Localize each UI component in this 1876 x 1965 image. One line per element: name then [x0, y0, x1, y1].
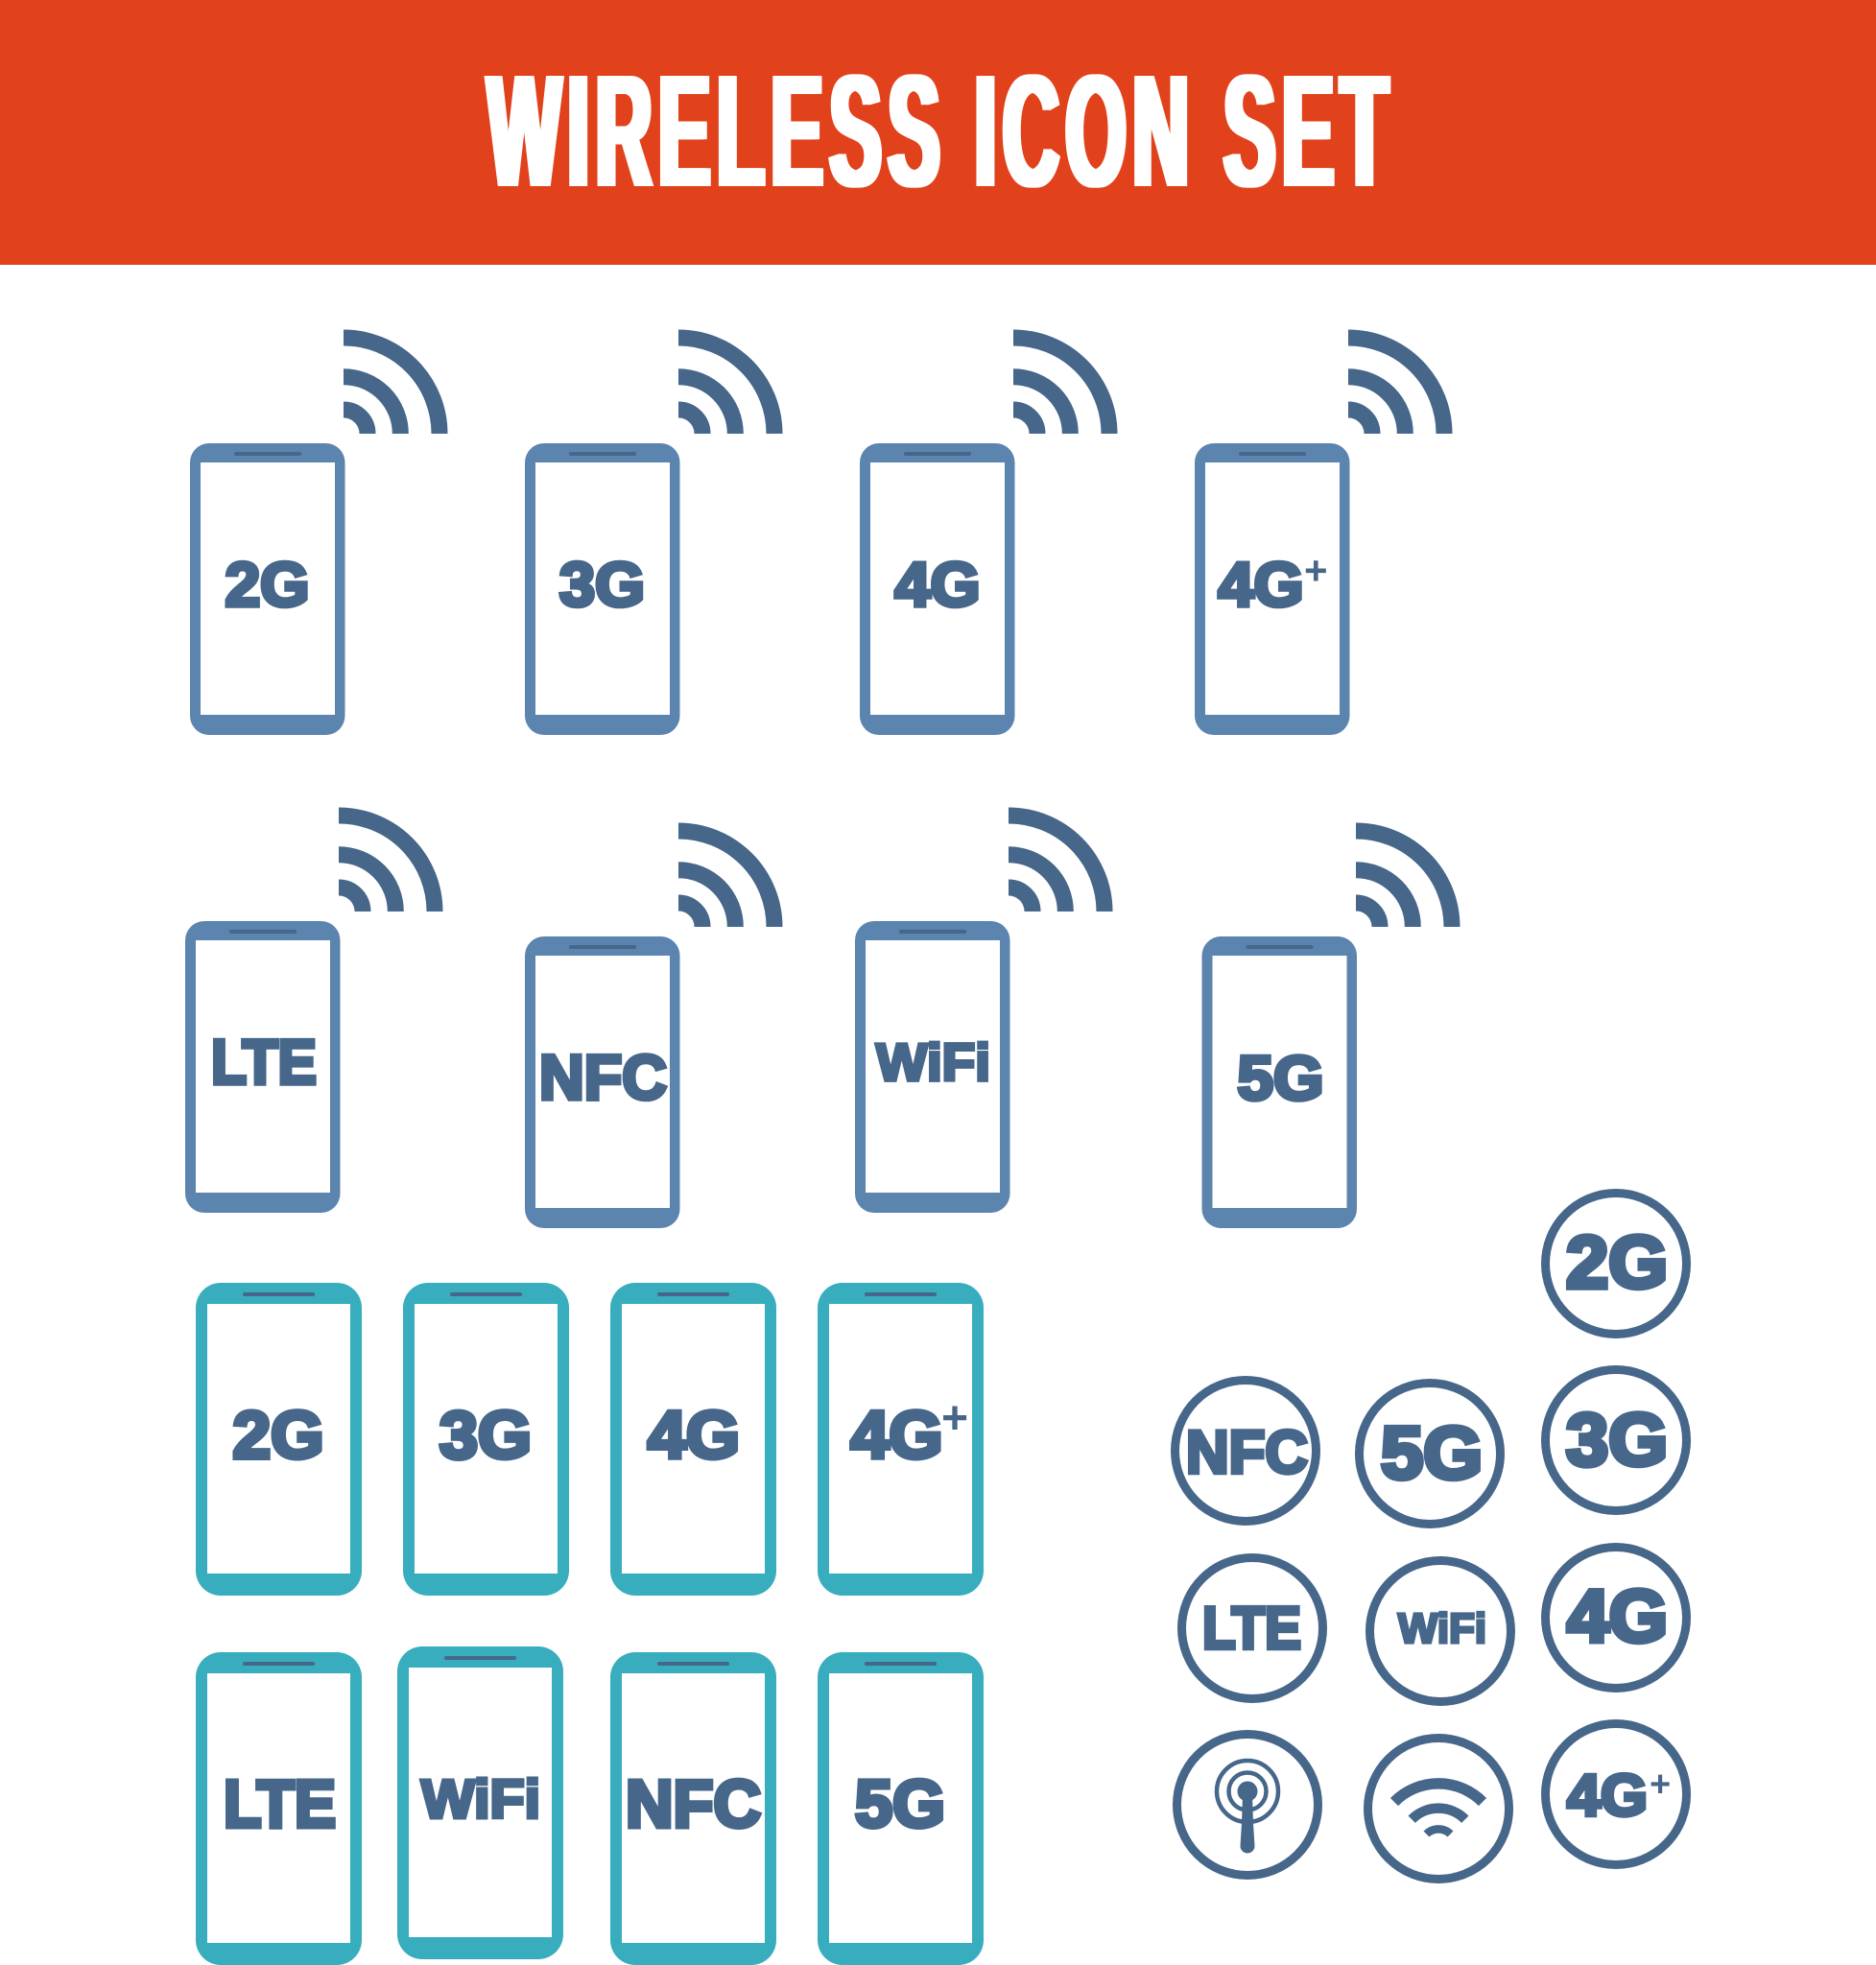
- circle badge: 4G+: 4G: [1567, 1763, 1648, 1828]
- circle badge: NFC: NFC: [1186, 1419, 1308, 1486]
- circle badge: 4G+: [1545, 1723, 1687, 1865]
- blue phone with signal: WiFi: [855, 816, 1104, 1213]
- teal phone: WiFi: WiFi: [421, 1769, 540, 1831]
- teal phone: WiFi: [397, 1646, 563, 1959]
- blue phone with signal: 2G: 2G: [225, 549, 309, 620]
- header banner: [0, 0, 1876, 265]
- circle badge: LTE: [1182, 1558, 1322, 1698]
- teal phone: 4G: 4G: [648, 1397, 740, 1472]
- circle badge: 2G: 2G: [1566, 1221, 1668, 1304]
- blue phone with signal: 4G: 4G: [894, 549, 981, 620]
- teal phone: 3G: 3G: [439, 1397, 532, 1472]
- circle badge: 5G: 5G: [1381, 1412, 1483, 1495]
- teal phone: 2G: [196, 1283, 362, 1596]
- teal phone: 3G: [403, 1283, 569, 1596]
- blue phone with signal: 4G: [860, 338, 1109, 735]
- blue phone with signal: LTE: LTE: [211, 1027, 317, 1098]
- circle badge: 4G+: +: [1650, 1764, 1671, 1805]
- circle badge: 2G: [1545, 1194, 1687, 1334]
- teal phone: 4G: [610, 1283, 776, 1596]
- circle badge: wifi waves icon: [1368, 1739, 1508, 1879]
- blue phone with signal: 4G+: 4G: [1219, 549, 1303, 620]
- circle badge: WiFi: [1370, 1560, 1510, 1702]
- blue phone with signal: 3G: 3G: [559, 549, 645, 620]
- blue phone with signal: WiFi: WiFi: [876, 1032, 990, 1092]
- circle badge: 4G: 4G: [1567, 1575, 1668, 1658]
- teal phone: NFC: [610, 1652, 776, 1965]
- teal phone: LTE: [196, 1652, 362, 1965]
- teal phone: 4G+: 4G: [850, 1397, 942, 1472]
- blue phone with signal: NFC: NFC: [539, 1042, 667, 1113]
- circle badge: 4G: [1545, 1547, 1687, 1689]
- circle badge: antenna icon: [1176, 1735, 1318, 1875]
- teal phone: 4G+: +: [941, 1393, 968, 1444]
- circle badge: 3G: [1545, 1370, 1687, 1510]
- circle badge: LTE: LTE: [1202, 1596, 1301, 1662]
- teal phone: 5G: [818, 1652, 984, 1965]
- circle badge: 3G: 3G: [1566, 1399, 1668, 1481]
- circle badge: WiFi: WiFi: [1398, 1605, 1486, 1652]
- teal phone: 4G+: [818, 1283, 984, 1596]
- blue phone with signal: 2G: [190, 338, 439, 735]
- teal phone: NFC: NFC: [626, 1766, 761, 1841]
- blue phone with signal: 3G: [525, 338, 774, 735]
- blue phone with signal: 4G+: +: [1304, 548, 1328, 593]
- circle badge: NFC: [1175, 1380, 1317, 1522]
- blue phone with signal: LTE: [185, 816, 435, 1213]
- blue phone with signal: NFC: [525, 831, 774, 1228]
- blue phone with signal: 5G: 5G: [1238, 1043, 1324, 1113]
- teal phone: LTE: LTE: [224, 1766, 336, 1841]
- blue phone with signal: 4G+: [1195, 338, 1444, 735]
- circle badge: 5G: [1359, 1384, 1501, 1524]
- blue phone with signal: 5G: [1201, 831, 1452, 1228]
- teal phone: 2G: 2G: [232, 1397, 324, 1472]
- teal phone: 5G: 5G: [855, 1766, 945, 1841]
- title: WIRELESS ICON SET: [487, 42, 1394, 221]
